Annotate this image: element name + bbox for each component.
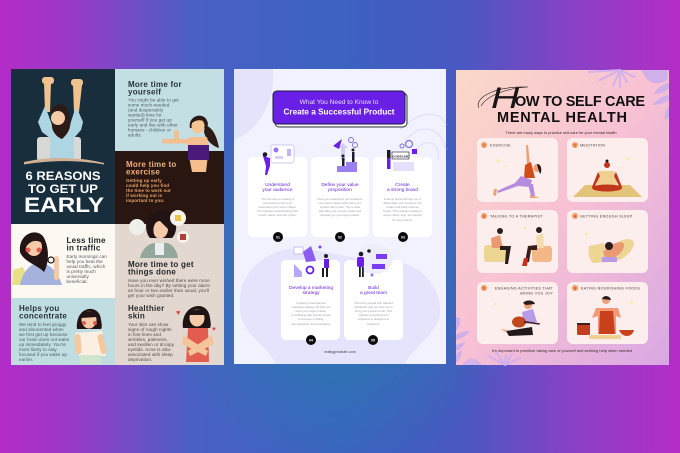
card 4: develop a marketing strategy: strategy (302, 290, 320, 296)
card: meditation: 2 (574, 144, 576, 148)
section: things done body and healthier skin: Healthier (128, 304, 164, 313)
banner heading (273, 91, 407, 127)
section: more time to exercise: exercise (126, 168, 160, 176)
banner heading: Create a Successful Product (283, 108, 395, 116)
card 5: build a great team: Surround yourself with talented (354, 301, 393, 305)
section: more time to exercise: important to you. (126, 198, 164, 203)
section: more time for yourself: More time for (128, 80, 182, 89)
section: things done body and healthier skin: eyelids. Acne is also (128, 347, 171, 352)
icon: woman hugging herself: ♥ (176, 308, 181, 317)
section: things done body and healthier skin: wrinkles, paleness, (128, 337, 168, 342)
section: more time for yourself (115, 69, 224, 151)
section: things done body and healthier skin: and swollen or droopy (128, 342, 175, 347)
section: less time in traffic: is pretty much (66, 269, 96, 274)
card 3: create a strong brand: for your product. (392, 218, 413, 222)
section: less time in traffic: Less time (66, 236, 106, 245)
card 5: build a great team: bring your product to life. This (355, 309, 392, 313)
card 5: build a great team (344, 244, 403, 340)
section: more time for yourself: some much-needed (128, 102, 170, 108)
badge 05: 05 (371, 338, 375, 342)
card 5: build a great team: includes everything from (358, 313, 389, 317)
card 5: build a great team: engineers to designers to (358, 317, 390, 321)
icon: rocket and growth steps (327, 138, 358, 172)
decorative leaves (456, 70, 669, 365)
icon: megaphone marketing (294, 246, 329, 277)
section: things done body and healthier skin: signs of rough nights (128, 327, 172, 332)
card 4: develop a marketing strategy: Develop a marketing (289, 285, 333, 291)
card: meditation (567, 138, 648, 202)
section: less time in traffic: beneficial. (66, 279, 88, 284)
icon: woman thumbs up (74, 309, 107, 364)
panel: 6 reasons to get up early (11, 69, 224, 365)
section: helps you concentrate: focused if you wake up (19, 352, 67, 357)
card 4: develop a marketing strategy: Creating a well-planned (296, 301, 326, 305)
card 4: develop a marketing strategy: of customer profiling, (298, 317, 324, 321)
icon: woman hugging herself (176, 306, 216, 362)
icon: therapist and patient on chairs: ✦ (523, 225, 528, 232)
card 2: define your value proposition: product will provide. This is what (320, 205, 360, 209)
icon: person playing guitar: ✦ (492, 300, 499, 309)
icon: woman stretching arm (162, 116, 219, 172)
card 2: define your value proposition: appealing to your target market. (320, 213, 360, 217)
section: more time to exercise: could help you find (126, 183, 169, 188)
card: talking to a therapist (477, 210, 558, 273)
card 3: create a strong brand: loyalty. This includes creating a (383, 209, 422, 213)
icon: woman ok sign (12, 232, 62, 285)
badge 03: 03 (401, 236, 405, 240)
section: things done body and healthier skin: get your wish granted. (128, 293, 174, 298)
card 5: build a great team: a great team (360, 290, 387, 296)
card: eating nourishing foods (567, 282, 648, 344)
card: talking to a therapist: TALKING TO A THERAPIST (490, 214, 543, 218)
card 4: develop a marketing strategy: reach your target market. (295, 309, 327, 313)
section: more time to get things done: things done (128, 268, 176, 276)
section: things done body and healthier skin: Your skin can show (128, 322, 169, 327)
card 3: create a strong brand: Create (395, 182, 410, 188)
icon: sleeping person on pillow: ✦ (583, 230, 590, 239)
section: less time in traffic: universally (66, 274, 90, 279)
card: getting enough sleep: 4 (574, 214, 576, 218)
card 2: define your value proposition: Define your value (321, 182, 359, 188)
card 2: define your value proposition (311, 138, 369, 237)
badge 02: 02 (338, 236, 342, 240)
card 1: understand your audience: The first step to creating a (261, 197, 294, 201)
section: helps you concentrate: and disoriented when (19, 327, 64, 332)
badge 04 (306, 335, 316, 345)
title text: 6 REASONS (26, 171, 101, 183)
card 2: define your value proposition: proposition (328, 187, 352, 193)
card 1: understand your audience: Understand (265, 182, 290, 188)
section: helps you concentrate (11, 298, 115, 365)
card 1: understand your audience: your audience (262, 187, 293, 193)
card: engaging activities: BRING YOU JOY (520, 292, 553, 296)
card 5: build a great team: Build (368, 285, 379, 291)
section: more time for yourself: yourself (128, 88, 161, 96)
section: more time for yourself: You might be able to get (128, 98, 179, 102)
section: things done body and healthier skin: skin (128, 312, 145, 320)
panel: how to self care mental health (456, 70, 669, 365)
title text (24, 171, 104, 217)
icon: meditating figure on mat: ✦ (624, 154, 632, 164)
card: exercise: 1 (483, 144, 485, 148)
panel section: title block (11, 69, 115, 224)
card 2: define your value proposition: will make your product unique and (319, 209, 362, 213)
section: things done body and healthier skin: an hour or two earlier than usual, you'll (128, 288, 209, 293)
section: more time to exercise: More time to (126, 160, 177, 169)
card 4: develop a marketing strategy: A marketing plan should consist (291, 313, 331, 317)
section: more time to get things done (115, 210, 224, 296)
section: things done body and healthier skin: associated with sleep (128, 352, 173, 357)
icon: brand guideline board: GUIDELINE (392, 154, 409, 158)
section: helps you concentrate: more likely to stay (19, 347, 58, 352)
panel: create a successful product (234, 69, 446, 364)
section: less time in traffic: usual traffic, which (66, 264, 106, 269)
section: things done body and healthier skin: Have you ever wished there were more (128, 278, 210, 283)
card 1: understand your audience: This includes understanding their (257, 209, 298, 213)
title: MENTAL HEALTH (497, 110, 627, 126)
section: helps you concentrate: up immediately. You're (19, 342, 66, 347)
card 2: define your value proposition: you need to define what value your (318, 201, 362, 205)
section: more time for yourself: wanted) time for (128, 112, 162, 118)
subtitle: There are many ways to practice self-care for your mental health (505, 130, 617, 135)
card: engaging activities: 5 (483, 286, 485, 290)
badge 03 (398, 232, 408, 242)
card 3: create a strong brand: market and build customer (386, 205, 419, 209)
card 3: create a strong brand: unique name, logo, and identity (383, 213, 423, 217)
background blobs (234, 69, 446, 364)
badge 02 (335, 232, 345, 242)
title: OW TO SELF CARE (515, 94, 645, 110)
section: less time in traffic: help you beat the (66, 259, 103, 264)
icon: person with dashboard (263, 145, 294, 175)
section: things done body and healthier skin: deprivation. (128, 357, 152, 362)
footer note: It's important to prioritize taking care of yourself and seeking help when needed (492, 348, 632, 353)
section: helps you concentrate: we first get up because (19, 332, 68, 337)
card: meditation: MEDITATION (580, 144, 605, 148)
card: talking to a therapist: 3 (483, 214, 485, 218)
badge 04: 04 (309, 338, 313, 342)
footer url: reallygreatsite.com (324, 350, 356, 354)
card: getting enough sleep: GETTING ENOUGH SLEEP (580, 214, 633, 218)
section: more time for yourself: (and desperately (128, 108, 164, 112)
section: helps you concentrate: We tend to feel groggy (19, 322, 67, 327)
section: helps you concentrate: our brain does not wake (19, 337, 70, 342)
section: helps you concentrate: Helps you (19, 304, 59, 313)
card 4: develop a marketing strategy: marketing strategy will help you (291, 305, 331, 309)
section: more time to exercise: Getting up early (126, 178, 162, 183)
card: eating nourishing foods: 6 (574, 286, 576, 290)
icon: yoga side lunge: ✦ (494, 156, 502, 166)
section: more time to exercise (115, 116, 224, 224)
icon: meditating figure on mat (573, 154, 642, 197)
card: engaging activities (477, 282, 558, 344)
title text: TO GET UP (28, 184, 98, 196)
title text: EARLY (24, 194, 104, 217)
section: less time in traffic: in traffic (66, 244, 101, 252)
card 1: understand your audience: successful product is to (263, 201, 292, 205)
section: things done body and healthier skin: in fine lines and (128, 332, 161, 337)
section: things done body and healthier skin: hours in the day? By setting your alarm (128, 283, 210, 288)
banner heading: What You Need to Know to (300, 99, 379, 106)
section: helps you concentrate: concentrate (19, 312, 67, 320)
card 1: understand your audience: needs, wants, and pain points. (259, 213, 297, 217)
badge 01: 01 (276, 236, 280, 240)
title: H (491, 82, 520, 115)
section: more time to get things done: More time to get (128, 260, 194, 269)
icon: meditating figure on mat: ✦ (620, 165, 624, 171)
icon: yoga side lunge (493, 145, 541, 198)
card 3: create a strong brand (373, 140, 432, 237)
card 3: create a strong brand: a strong brand (387, 187, 418, 193)
card 4: develop a marketing strategy: demographics, and messaging. (292, 322, 331, 326)
card: exercise: EXERCISE (490, 144, 511, 148)
card 1: understand your audience: understand your target market. (258, 205, 297, 209)
section: things done body and healthier skin (115, 278, 224, 365)
card 3: create a strong brand: differentiate your product in the (383, 201, 422, 205)
icon: person cooking: ✦ (628, 298, 636, 308)
icon: woman hugging herself: ♥ (212, 326, 216, 333)
section: more time to exercise: if working out is (126, 193, 163, 198)
icon: team on screens (355, 244, 393, 277)
section: less time in traffic (11, 224, 115, 298)
card 3: create a strong brand: A strong brand will help you to (384, 197, 422, 201)
card: exercise (477, 138, 558, 202)
card 5: build a great team: marketers. (367, 322, 380, 326)
icon: woman with phone and thought bubbles (129, 210, 189, 258)
icon: yoga side lunge: ✦ (503, 164, 507, 170)
card: eating nourishing foods: EATING NOURISHING FOODS (581, 286, 640, 290)
card: engaging activities: ENGAGING ACTIVITIES THAT (495, 286, 553, 290)
title (478, 82, 645, 126)
badge 01 (273, 232, 283, 242)
section: more time for yourself: early and live with other (128, 122, 178, 128)
icon: woman stretching in bed (24, 77, 104, 164)
section: less time in traffic: Early mornings can (66, 254, 107, 259)
card 1: understand your audience (248, 145, 307, 237)
card 5: build a great team: individuals who can help you to (354, 305, 393, 309)
section: more time for yourself: adults. (128, 132, 142, 138)
badge 05 (368, 335, 378, 345)
section: helps you concentrate: earlier. (19, 357, 33, 362)
card 2: define your value proposition: Once you understand your audience, (317, 197, 363, 201)
section: more time for yourself: humans - children or (128, 128, 171, 132)
section: more time to exercise: the time to work out (126, 188, 171, 193)
card: getting enough sleep (567, 210, 648, 273)
card 4: develop a marketing strategy (281, 246, 340, 340)
section: more time for yourself: yourself if you get up (128, 118, 172, 122)
